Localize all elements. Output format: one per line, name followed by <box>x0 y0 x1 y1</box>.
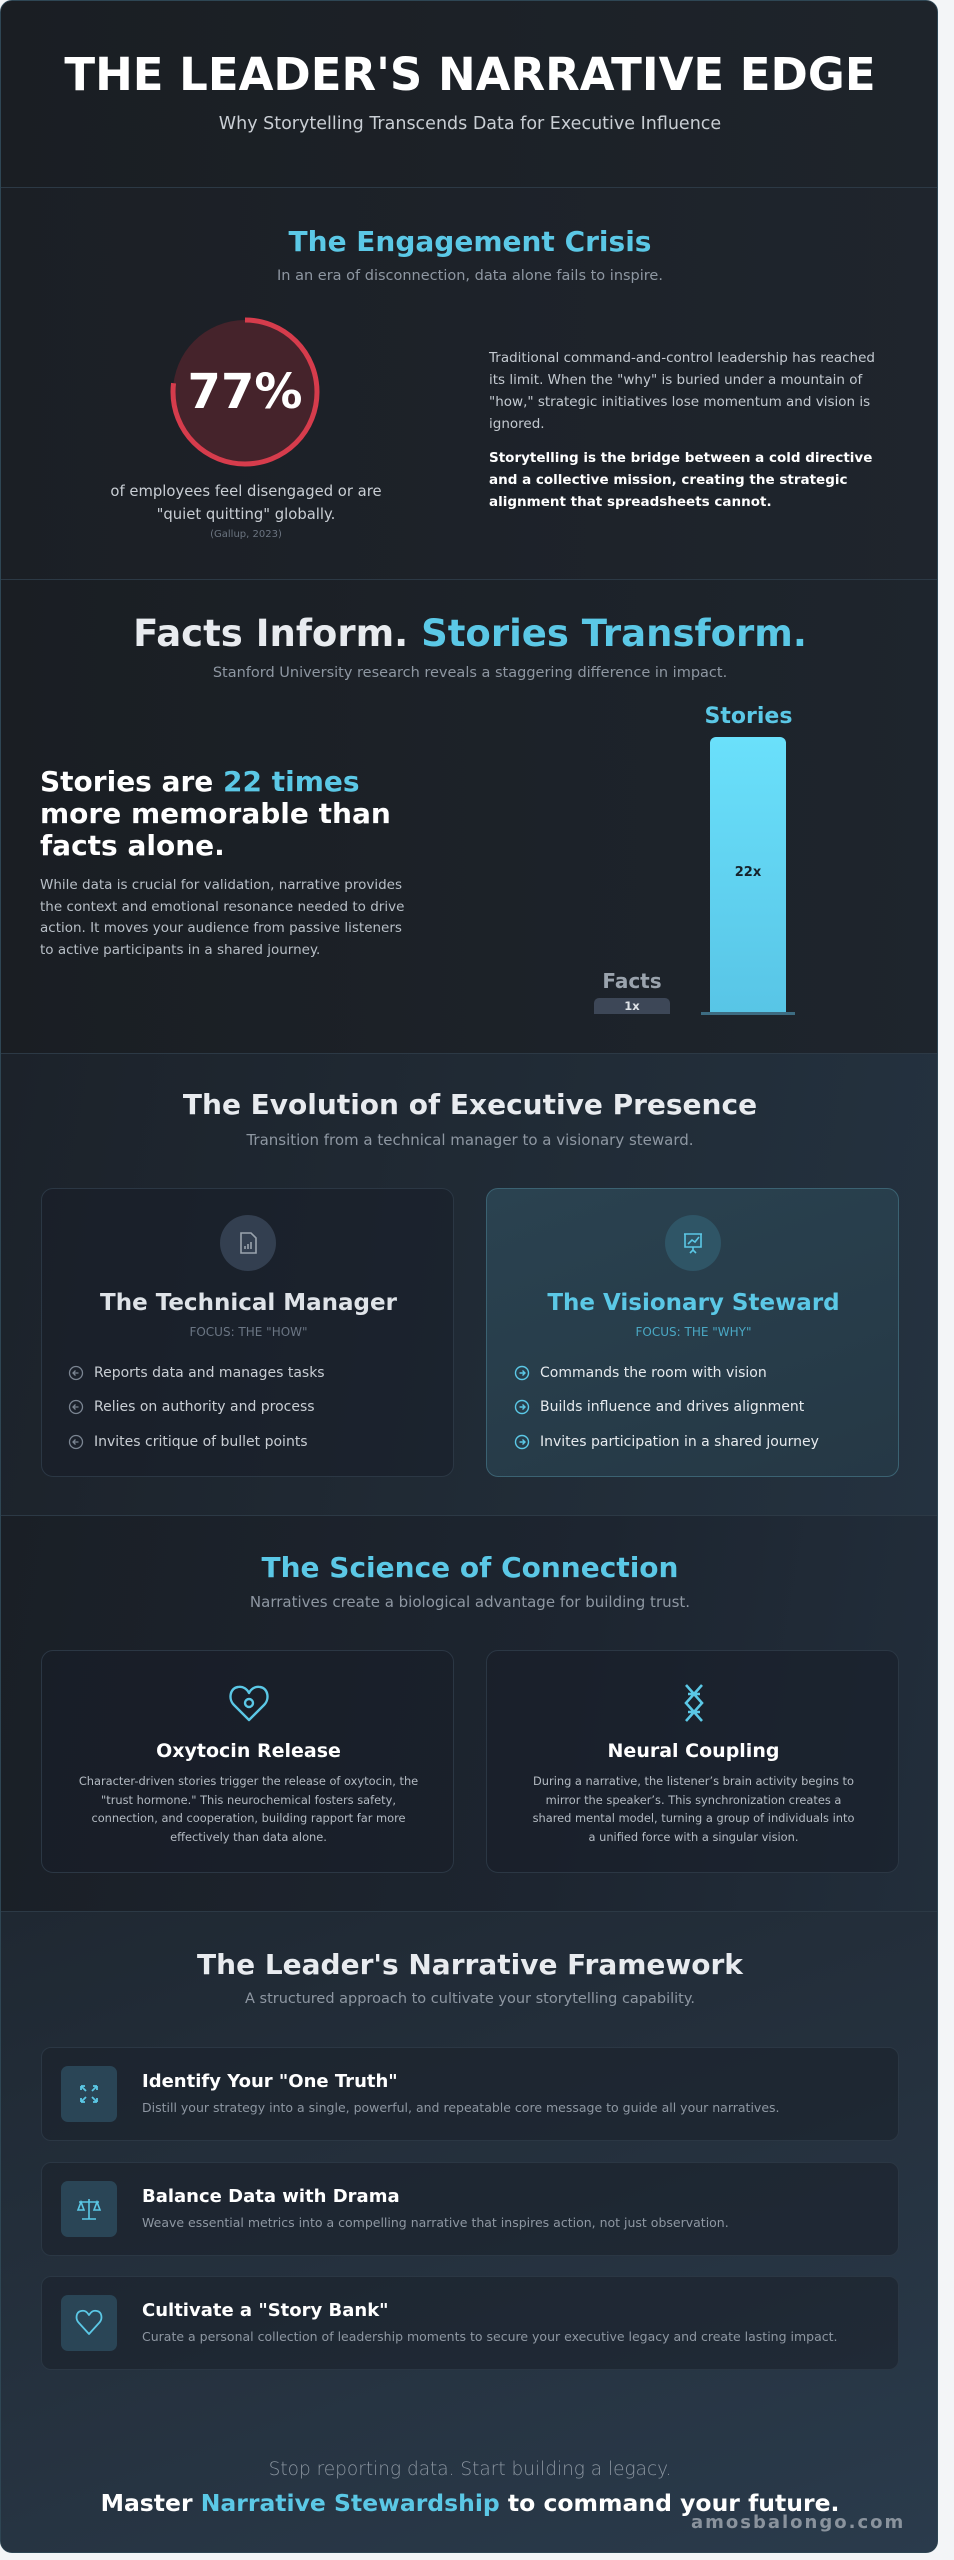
card: technical manager <box>41 1188 454 1477</box>
panel: science of connection <box>1 1515 939 1911</box>
bullet list: Builds influence and drives alignment <box>540 1399 804 1415</box>
icon: heart outline <box>61 2295 117 2351</box>
icon: scales <box>61 2181 117 2237</box>
icon: presentation <box>665 1215 721 1271</box>
heading: The Evolution of Executive Presence <box>183 1088 757 1121</box>
text: While data is crucial for validation, narrative provides the context and emotional resonance needed to drive action. It moves your audience from passive listeners to active participants in a shared journey. <box>40 877 404 958</box>
description: Character-driven stories trigger the release of oxytocin, the "trust hormone." This neurochemical fosters safety, connection, and cooperation, building rapport far more effectively than data alone. <box>79 1774 418 1844</box>
stat headline: Stories are 22 times <box>40 765 360 798</box>
card: oxytocin <box>41 1650 454 1873</box>
icon: document chart <box>220 1215 276 1271</box>
stat headline: facts alone. <box>40 829 225 862</box>
bar chart <box>594 704 795 1015</box>
item: balance <box>41 2162 899 2256</box>
focus: FOCUS: THE "WHY" <box>636 1325 752 1339</box>
stat caption: (Gallup, 2023) <box>210 529 282 540</box>
item: story bank: Curate a personal collection of leadership moments to secure your executive legacy and create lasting impact. <box>142 2329 838 2344</box>
subtitle: Why Storytelling Transcends Data for Executive Influence <box>219 114 721 134</box>
bar: stories 22x: 22x <box>735 865 761 880</box>
panel: facts vs stories <box>1 579 939 1053</box>
card title: The Visionary Steward <box>547 1290 840 1316</box>
bullet list: Invites critique of bullet points <box>94 1434 308 1450</box>
description: During a narrative, the listener’s brain activity begins to mirror the speaker’s. This synchronization creates a shared mental model, turning a group of individuals into a unified force with a singular vision. <box>533 1774 854 1844</box>
panel: narrative framework <box>1 1911 939 2556</box>
stat headline <box>40 765 391 862</box>
bullet list: Invites participation in a shared journey <box>540 1434 819 1450</box>
panel: engagement crisis <box>1 187 939 579</box>
donut stat: 77%: 77% <box>188 364 302 420</box>
focus: FOCUS: THE "HOW" <box>189 1325 308 1339</box>
text block <box>488 350 875 510</box>
subheading: Narratives create a biological advantage for building trust. <box>250 1593 690 1611</box>
stat headline: more memorable than <box>40 797 391 830</box>
bullet list: Relies on authority and process <box>94 1399 315 1415</box>
bar: facts 1x <box>594 998 670 1014</box>
label: stories: Stories <box>705 704 792 729</box>
icon: heart <box>229 1686 269 1722</box>
card: neural coupling <box>486 1650 899 1873</box>
donut stat: 77% <box>170 318 320 466</box>
icon: focus arrows <box>61 2066 117 2122</box>
header <box>1 1 939 187</box>
stat caption: "quiet quitting" globally. <box>157 506 335 523</box>
item: one truth: Distill your strategy into a single, powerful, and repeatable core message to guide all your narratives. <box>142 2100 780 2115</box>
bullet list <box>514 1365 819 1450</box>
label: facts: Facts <box>602 969 662 993</box>
item: balance: Weave essential metrics into a compelling narrative that inspires action, not just observation. <box>142 2215 729 2230</box>
heading: The Leader's Narrative Framework <box>197 1948 743 1981</box>
panel: evolution of executive presence <box>1 1053 939 1515</box>
icon: dna <box>684 1684 704 1722</box>
text block: Traditional command-and-control leadership has reached its limit. When the "why" is buried under a mountain of "how," strategic initiatives lose momentum and vision is ignored. <box>489 350 875 432</box>
footer tagline: Stop reporting data. Start building a legacy. <box>269 2459 671 2480</box>
bar: stories 22x <box>710 737 786 1013</box>
heading: The Science of Connection <box>262 1551 678 1584</box>
item: story bank <box>41 2276 899 2370</box>
card title: Oxytocin Release <box>156 1740 341 1762</box>
bullet list: Reports data and manages tasks <box>94 1365 325 1381</box>
item: one truth <box>41 2047 899 2141</box>
baseline <box>701 1012 795 1015</box>
watermark: amosbalongo.com <box>691 2512 905 2533</box>
title: THE LEADER'S NARRATIVE EDGE <box>64 48 876 101</box>
subheading: Transition from a technical manager to a visionary steward. <box>246 1131 694 1149</box>
stat caption: of employees feel disengaged or are <box>110 483 382 500</box>
card: visionary steward <box>486 1188 899 1477</box>
bar: facts 1x: 1x <box>624 999 640 1013</box>
text block: Storytelling is the bridge between a cold directive and a collective mission, creating the strategic alignment that spreadsheets cannot. <box>489 450 872 510</box>
item: balance: Balance Data with Drama <box>142 2186 400 2207</box>
heading: Facts Inform. Stories Transform. <box>133 612 807 655</box>
card title: Neural Coupling <box>608 1740 779 1762</box>
bullet list <box>68 1365 325 1450</box>
subheading: In an era of disconnection, data alone fails to inspire. <box>277 268 663 284</box>
bullet list: Commands the room with vision <box>540 1365 767 1381</box>
footer call to action: Master Narrative Stewardship to command your future. <box>101 2489 839 2517</box>
stat caption <box>110 483 382 540</box>
card title: The Technical Manager <box>100 1290 397 1316</box>
subheading: A structured approach to cultivate your storytelling capability. <box>245 1991 695 2007</box>
subheading: Stanford University research reveals a staggering difference in impact. <box>213 665 727 681</box>
heading: The Engagement Crisis <box>289 225 651 258</box>
item: one truth: Identify Your "One Truth" <box>142 2071 398 2092</box>
item: story bank: Cultivate a "Story Bank" <box>142 2300 389 2321</box>
